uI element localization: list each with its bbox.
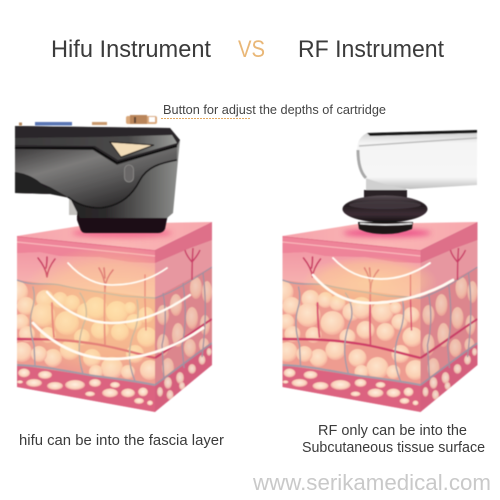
neck (366, 176, 406, 192)
upper shell (15, 126, 180, 163)
caption: RF: RF only can be into the (318, 422, 467, 439)
RF pink contact glow (343, 228, 431, 238)
top controls (35, 122, 72, 126)
grey mid shell (15, 147, 177, 208)
black disk (342, 196, 428, 222)
bottom head (358, 222, 413, 234)
watermark URL: www.serikamedical.com (252, 470, 491, 495)
panel: skin cube under RF (272, 222, 478, 412)
panel: skin cube under hifu (6, 222, 212, 412)
hifu energy waves (33, 263, 203, 359)
caption: hifu: hifu can be into the fascia layer (19, 432, 224, 449)
cartridge base (77, 205, 172, 233)
yellow energy glow (25, 250, 156, 368)
caption: RF: Subcutaneous tissue surface (302, 439, 485, 456)
yellow energy glow (302, 256, 438, 308)
oval indicator (124, 165, 134, 182)
title: Hifu Instrument: Hifu Instrument (51, 36, 211, 63)
hifu pink contact glow (72, 228, 172, 238)
dark swoosh edge (15, 146, 177, 163)
RF energy waves (313, 258, 453, 303)
main body (15, 126, 180, 218)
silver cartridge collar (69, 197, 78, 215)
gold triangle button (110, 142, 154, 157)
brass depth knob (126, 115, 157, 124)
caption: RF (302, 422, 485, 456)
title: VS: VS (238, 36, 265, 63)
icon: hifu instrument handpiece (15, 115, 180, 233)
white handle (357, 130, 477, 189)
dark side panel (15, 172, 50, 194)
title: RF Instrument: RF Instrument (298, 36, 444, 63)
icon: RF instrument handpiece (342, 130, 477, 234)
callout: button for adjusting cartridge depth: Button for adjust the depths of cartridge (163, 103, 386, 117)
